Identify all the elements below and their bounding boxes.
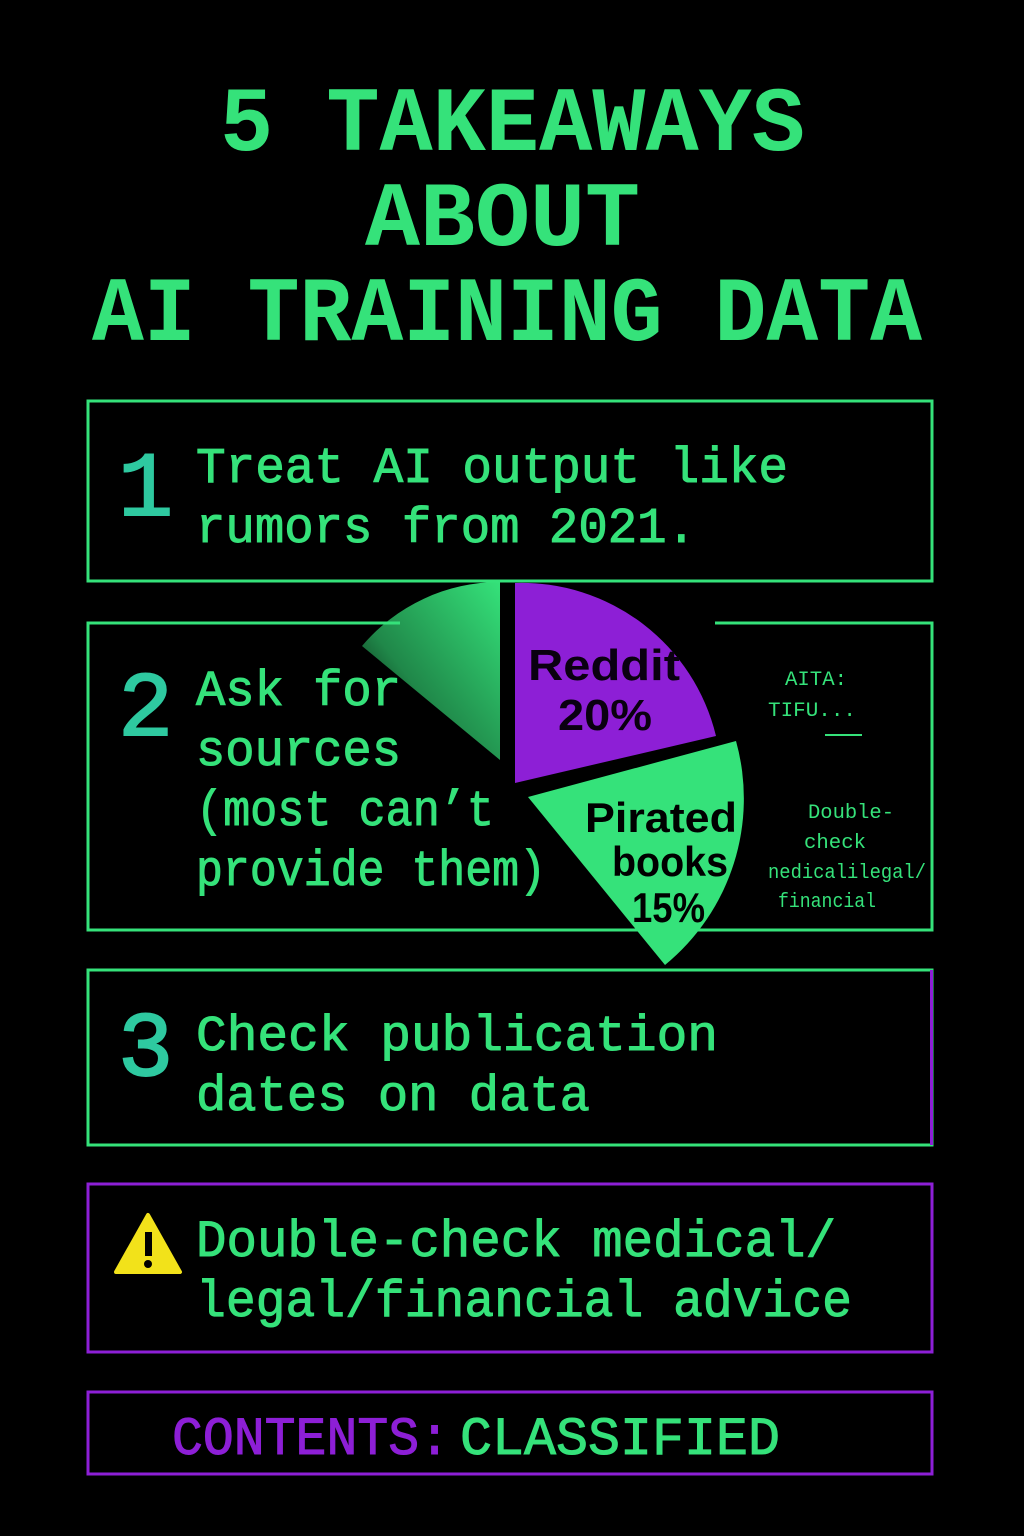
number 1: 1 <box>118 438 173 543</box>
text 4: legal/financial advice <box>196 1273 852 1332</box>
text 2: sources <box>196 724 401 781</box>
text 1: rumors from 2021. <box>196 501 696 558</box>
icon: warning <box>116 1215 180 1272</box>
pie: reddit slice <box>515 583 716 783</box>
pie: faded slice <box>362 582 500 760</box>
panel: takeaway 1 <box>88 401 932 581</box>
panel: takeaway 3 <box>88 970 933 1145</box>
side notes: Double- <box>808 802 894 825</box>
text 3: dates on data <box>196 1069 590 1126</box>
pie: pirated books slice: Pirated <box>585 794 737 841</box>
pie: reddit slice: Reddit <box>528 641 680 690</box>
text 2: Ask for <box>196 664 401 721</box>
side notes: TIFU... <box>768 700 856 723</box>
number 2: 2 <box>118 658 173 763</box>
number 3: 3 <box>118 998 173 1103</box>
text 2: provide them) <box>196 844 546 901</box>
title <box>92 73 923 368</box>
footer: contents classified: CLASSIFIED <box>460 1410 780 1471</box>
text 3: Check publication <box>196 1009 718 1066</box>
text 4: Double-check medical/ <box>196 1213 836 1272</box>
panel: takeaway 2 <box>88 623 932 930</box>
title: 5 TAKEAWAYS <box>220 73 805 178</box>
pie: pirated books slice: books <box>612 838 728 885</box>
side notes: AITA: <box>785 669 847 692</box>
panel: takeaway 4 <box>88 1184 932 1352</box>
footer: contents classified <box>88 1392 932 1474</box>
pie: pirated books slice: 15% <box>632 884 705 931</box>
pie: pirated books slice <box>528 741 744 965</box>
side notes: nedicalilegal/ <box>768 862 926 885</box>
title: ABOUT <box>365 168 640 273</box>
text 1: Treat AI output like <box>196 441 788 498</box>
side notes: check <box>804 832 866 855</box>
side notes: financial <box>778 891 876 914</box>
footer: contents classified: CONTENTS: <box>172 1410 450 1471</box>
text 2: (most can’t <box>196 784 494 841</box>
pie chart <box>362 582 744 965</box>
pie: reddit slice: 20% <box>558 691 652 740</box>
side notes <box>768 669 926 914</box>
title: AI TRAINING DATA <box>92 263 923 368</box>
